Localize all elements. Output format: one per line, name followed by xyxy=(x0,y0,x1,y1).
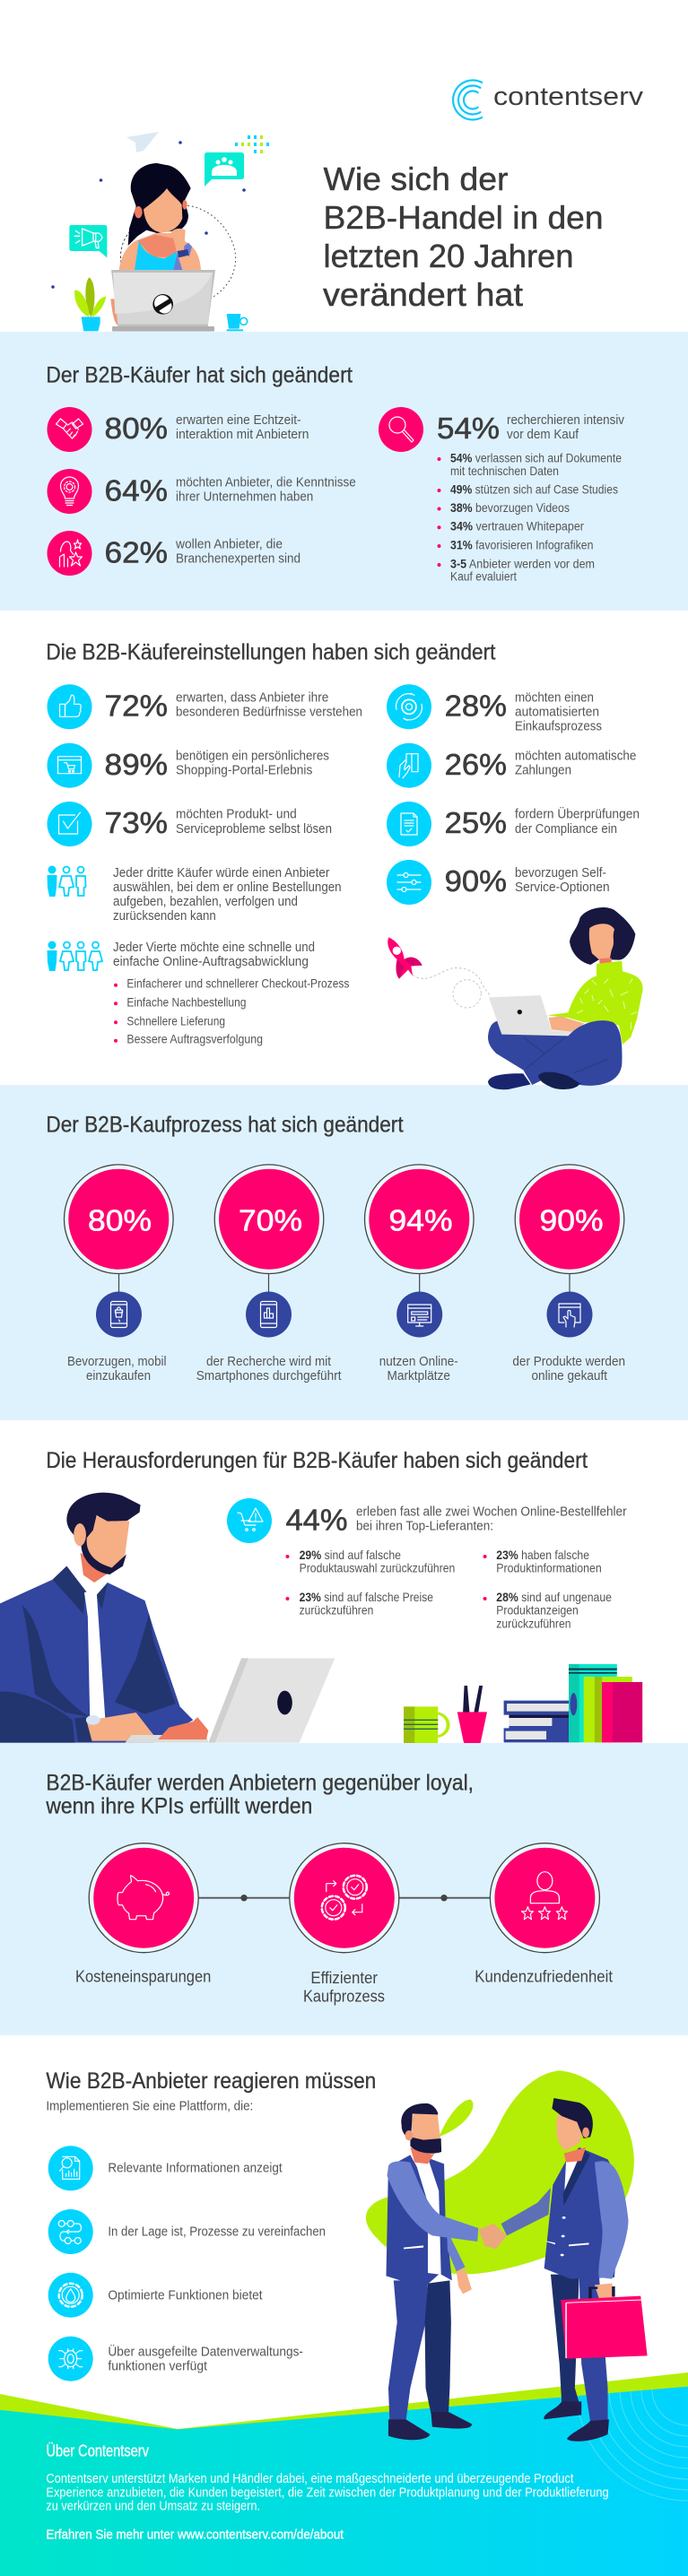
about text: Über Contentserv xyxy=(46,2442,149,2460)
bullet list: order handling xyxy=(114,976,349,1046)
bullet list: order handling: Einfacherer und schnellerer Checkout-Prozess xyxy=(126,976,349,991)
KPI: Effizienter Kaufprozess: Effizienter xyxy=(310,1969,378,1987)
stat circle: 94%: nutzen Online- xyxy=(379,1354,458,1369)
stat circle: 80%: Bevorzugen, mobil xyxy=(67,1354,166,1369)
panel: Die Herausforderungen für B2B-Käufer haben sich geändert xyxy=(0,1448,642,1743)
stat circle: 80%: 80% xyxy=(88,1203,152,1236)
KPI: Effizienter Kaufprozess xyxy=(290,1843,399,2005)
stat: 73% xyxy=(47,802,332,846)
stat: 54% xyxy=(379,407,624,452)
stat: 54%: recherchieren intensiv xyxy=(507,412,624,428)
bullet list: order handling: Einfache Nachbestellung xyxy=(126,994,246,1009)
title: B2B-Handel in den xyxy=(323,199,603,236)
stat: 90%: 90% xyxy=(445,864,507,898)
title: letzten 20 Jahren xyxy=(323,238,574,274)
about text: Contentserv unterstützt Marken und Händler dabei, eine maßgeschneiderte und überzeugende Product xyxy=(46,2471,574,2486)
stat: 90% xyxy=(387,860,610,905)
KPI: Kundenzufriedenheit: Kundenzufriedenheit xyxy=(475,1968,613,1986)
stat: 28%: 28% xyxy=(445,690,507,723)
bullet list: order errors: 28% sind auf ungenaue xyxy=(496,1590,612,1604)
item: Prozesse vereinfachen: In der Lage ist, Prozesse zu vereinfachen xyxy=(108,2225,326,2240)
bullet list: order errors: 23% sind auf falsche Preise xyxy=(300,1590,433,1604)
figure xyxy=(74,163,248,332)
illustration: thinking woman at laptop xyxy=(51,132,269,332)
item: Datenverwaltung: funktionen verfügt xyxy=(108,2358,208,2373)
stat circle: 94%: 94% xyxy=(389,1203,452,1236)
stat: 64% xyxy=(47,469,356,514)
text: every third buyer: zurücksenden kann xyxy=(113,908,216,924)
KPI: Kosteneinsparungen xyxy=(75,1843,211,1986)
stat circle: 90%: der Produkte werden xyxy=(512,1354,625,1369)
bullet list: order errors: Produktanzeigen xyxy=(496,1603,579,1618)
stat: 26%: möchten automatische xyxy=(515,749,636,764)
panel: Der B2B-Käufer hat sich geändert xyxy=(0,332,688,611)
bullet list: order errors: zurückzuführen xyxy=(300,1603,373,1618)
stat: 89%: 89% xyxy=(104,748,168,781)
stat: 80%: interaktion mit Anbietern xyxy=(176,427,309,442)
stat: 72%: 72% xyxy=(104,690,168,723)
KPI: Effizienter Kaufprozess: Kaufprozess xyxy=(303,1987,385,2005)
stat: 89%: benötigen ein persönlicheres xyxy=(176,749,329,764)
stat circle: 94%: Marktplätze xyxy=(388,1368,450,1383)
bullet list: order handling: Bessere Auftragsverfolgung xyxy=(126,1032,263,1046)
stat circle: 70%: Smartphones durchgeführt xyxy=(196,1368,342,1383)
stat: 62% xyxy=(47,531,300,576)
stat: 25% xyxy=(387,802,640,846)
bullet list: research: 38% bevorzugen Videos xyxy=(450,500,570,515)
stat: 26%: Zahlungen xyxy=(515,763,571,778)
heading: Der B2B-Käufer hat sich geändert xyxy=(46,363,353,388)
illustration: two businessmen shaking hands xyxy=(366,2070,648,2442)
item: Datenverwaltung: Über ausgefeilte Datenverwaltungs- xyxy=(108,2343,303,2359)
logo: contentserv xyxy=(453,81,644,120)
item: Optimierte Funktionen xyxy=(48,2273,263,2318)
stat: 26% xyxy=(387,743,636,788)
heading: wenn ihre KPIs erfüllt werden xyxy=(45,1794,312,1819)
bullet list: order errors: zurückzuführen xyxy=(496,1616,570,1630)
bullet list: research: 31% favorisieren Infografiken xyxy=(450,537,594,551)
about text: Erfahren Sie mehr unter www.contentserv.com/de/about xyxy=(46,2527,344,2542)
panel: Die B2B-Käufereinstellungen haben sich geändert xyxy=(46,639,643,1089)
heading: Die B2B-Käufereinstellungen haben sich geändert xyxy=(46,639,495,664)
bullet list: research: 3-5 Anbieter werden vor dem xyxy=(450,556,595,570)
stat circle: 70%: der Recherche wird mit xyxy=(206,1354,332,1369)
footer band: green stripe and gradient xyxy=(0,2372,688,2576)
KPI: Kosteneinsparungen: Kosteneinsparungen xyxy=(75,1968,211,1986)
title: Wie sich der xyxy=(323,160,509,197)
stat: 90%: bevorzugen Self- xyxy=(515,865,606,880)
stat: 25%: 25% xyxy=(445,806,507,839)
bullet list: research: Kauf evaluiert xyxy=(450,569,517,584)
stat circle: 80% xyxy=(65,1165,173,1383)
bullet list: research: 49% stützen sich auf Case Studies xyxy=(450,481,618,496)
stat circle: 90%: online gekauft xyxy=(531,1368,608,1383)
item: Prozesse vereinfachen xyxy=(48,2209,326,2254)
stat: 44% xyxy=(227,1498,627,1543)
stat: 44%: 44% xyxy=(285,1504,348,1537)
stat: 89% xyxy=(47,743,329,788)
panel: B2B-Käufer werden Anbietern gegenüber loyal xyxy=(0,1743,688,2035)
text: every third buyer xyxy=(113,865,342,924)
speech bubble: megaphone xyxy=(69,225,107,257)
bullet list: research: 34% vertrauen Whitepaper xyxy=(450,519,584,533)
stat: 80% xyxy=(47,407,309,452)
bullet list: research: mit technischen Daten xyxy=(450,464,559,478)
text: every fourth buyer: Jeder Vierte möchte eine schnelle und xyxy=(113,940,315,955)
stat: 62%: wollen Anbieter, die xyxy=(175,536,283,551)
panel: header xyxy=(0,0,688,332)
item: Datenverwaltung xyxy=(48,2337,303,2381)
item: Optimierte Funktionen: Optimierte Funktionen bietet xyxy=(108,2287,263,2303)
stat: 25%: der Compliance ein xyxy=(515,821,617,837)
stat: 64%: 64% xyxy=(104,474,168,507)
title: verändert hat xyxy=(323,276,523,313)
stat: 64%: möchten Anbieter, die Kenntnisse xyxy=(176,474,356,490)
bullet list: order errors xyxy=(285,1548,612,1630)
stat: 73%: möchten Produkt- und xyxy=(176,807,297,822)
item: Relevante Informationen: Relevante Informationen anzeigt xyxy=(108,2161,283,2176)
stat: 54%: 54% xyxy=(437,412,500,445)
bullet list: order errors: Produktinformationen xyxy=(496,1561,602,1575)
bullet list: order errors: Produktauswahl zurückzuführen xyxy=(300,1561,455,1575)
stat circle: 90% xyxy=(512,1165,625,1383)
stat: 62%: Branchenexperten sind xyxy=(176,551,300,566)
stat: 28%: automatisierten xyxy=(515,705,599,720)
text: every fourth buyer: einfache Online-Auftragsabwicklung xyxy=(113,954,309,969)
stat: 64%: ihrer Unternehmen haben xyxy=(176,489,313,504)
logo: contentserv: contentserv xyxy=(493,82,644,111)
stat: 80%: 80% xyxy=(104,412,168,445)
bullet list: order errors: 23% haben falsche xyxy=(496,1548,589,1562)
stat: 25%: fordern Überprüfungen xyxy=(515,806,640,822)
item: Relevante Informationen xyxy=(48,2146,283,2190)
stat: 28%: möchten einen xyxy=(515,690,594,705)
stat: 26%: 26% xyxy=(445,748,507,781)
text: every third buyer: auswählen, bei dem er online Bestellungen xyxy=(113,880,342,895)
text: every third buyer: Jeder dritte Käufer würde einen Anbieter xyxy=(113,865,329,880)
icon: three people xyxy=(47,866,86,897)
speech bubble: team xyxy=(205,152,244,186)
text: every third buyer: aufgeben, bezahlen, verfolgen und xyxy=(113,894,298,909)
stat circle: 94% xyxy=(364,1165,474,1383)
heading: Die Herausforderungen für B2B-Käufer haben sich geändert xyxy=(46,1448,588,1473)
illustration: man at laptop and desk items xyxy=(0,1493,642,1743)
panel: Der B2B-Kaufprozess hat sich geändert xyxy=(0,1085,688,1420)
stat circle: 70% xyxy=(196,1165,342,1383)
stat: 90%: Service-Optionen xyxy=(515,880,610,895)
stat: 44%: bei ihren Top-Lieferanten: xyxy=(356,1518,493,1533)
stat: 73%: Serviceprobleme selbst lösen xyxy=(176,821,332,837)
heading: B2B-Käufer werden Anbietern gegenüber loyal, xyxy=(46,1771,474,1796)
bullet list: research: 54% verlassen sich auf Dokumente xyxy=(450,450,622,464)
stat: 72%: erwarten, dass Anbieter ihre xyxy=(176,690,328,705)
stat: 89%: Shopping-Portal-Erlebnis xyxy=(176,763,312,778)
stat: 73%: 73% xyxy=(104,806,168,839)
stat circle: 90%: 90% xyxy=(540,1203,603,1236)
stat: 72% xyxy=(47,684,362,729)
KPI: Kundenzufriedenheit xyxy=(475,1843,613,1986)
stat circle: 70%: 70% xyxy=(239,1203,302,1236)
stat: 28%: Einkaufsprozess xyxy=(515,719,602,734)
stat: 72%: besonderen Bedürfnisse verstehen xyxy=(176,705,362,720)
about text xyxy=(46,2442,609,2542)
icon: four people xyxy=(47,941,102,971)
heading: Wie B2B-Anbieter reagieren müssen xyxy=(46,2069,376,2094)
text: every fourth buyer xyxy=(113,940,315,969)
about text: zu verkürzen und den Umsatz zu steigern. xyxy=(46,2499,260,2514)
connectors xyxy=(198,1895,490,1901)
panel: Wie B2B-Anbieter reagieren müssen xyxy=(0,2069,688,2576)
heading xyxy=(45,1771,474,1819)
subheading: Implementieren Sie eine Plattform, die: xyxy=(46,2099,253,2114)
stat: 62%: 62% xyxy=(104,536,168,569)
dashed path and decorations xyxy=(51,132,269,289)
stat: 28% xyxy=(387,684,602,734)
stat: 54%: vor dem Kauf xyxy=(507,427,579,442)
stat: 80%: erwarten eine Echtzeit- xyxy=(176,412,301,428)
about text: Experience anzubieten, die Kunden begeistert, die Zeit zwischen der Produktplanung und der Produktlieferung xyxy=(46,2485,609,2500)
heading: Der B2B-Kaufprozess hat sich geändert xyxy=(46,1112,404,1137)
illustration: rocket and woman with laptop xyxy=(388,907,643,1089)
stat: 44%: erleben fast alle zwei Wochen Online-Bestellfehler xyxy=(356,1504,627,1519)
title xyxy=(323,160,603,313)
bullet list: order handling: Schnellere Lieferung xyxy=(126,1013,225,1028)
stat circle: 80%: einzukaufen xyxy=(86,1368,151,1383)
bullet list: order errors: 29% sind auf falsche xyxy=(300,1548,401,1562)
bullet list: research xyxy=(438,450,622,584)
